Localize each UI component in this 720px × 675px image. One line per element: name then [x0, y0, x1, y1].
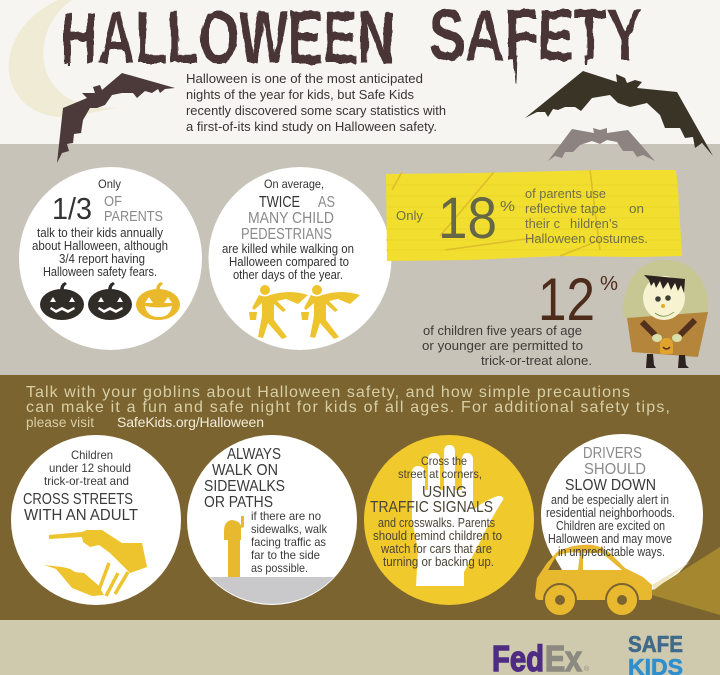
intro text: nights of the year for kids, but Safe Kids — [186, 87, 414, 102]
panel: one third of parents: 3/4 report having — [59, 252, 145, 266]
panel: drivers should slow down — [535, 434, 720, 616]
tips intro text: can make it a fun and safe night for kids of all ages. For additional safety tips, — [26, 399, 670, 416]
panel: drivers should slow down: residential neighborhoods. — [546, 506, 675, 520]
panel: reflective tape statistic: reflective tape — [525, 201, 606, 216]
panel: always walk on sidewalks: facing traffic as — [251, 535, 326, 549]
panel: cross streets with an adult: CROSS STREETS — [23, 491, 133, 508]
panel: drivers should slow down: Halloween and may move — [548, 532, 672, 546]
background: statistics band — [0, 144, 720, 375]
panel: use traffic signals: watch for cars that are — [380, 542, 492, 556]
icon: left bat — [57, 73, 175, 163]
panel: always walk on sidewalks: if there are no — [251, 509, 321, 523]
panel: cross streets with an adult: trick-or-treat and — [44, 474, 129, 488]
panel: twice as many child pedestrians: Halloween compared to — [229, 255, 349, 269]
logo: Safe Kids — [628, 631, 683, 675]
panel: one third of parents: 1/3 — [52, 191, 92, 226]
logo: FedEx: ® — [584, 665, 590, 673]
panel: drivers should slow down: DRIVERS — [583, 445, 642, 462]
icon: handshake — [44, 530, 147, 596]
background: sponsor band — [0, 620, 720, 675]
panel: twelve percent statistic: of children five years of age — [423, 323, 582, 338]
panel: drivers should slow down: SHOULD — [584, 461, 646, 478]
icon: small grey bat — [548, 128, 655, 161]
panel: use traffic signals: street at corners, — [398, 467, 482, 481]
logo: FedEx — [492, 638, 590, 675]
panel: twelve percent statistic — [422, 266, 618, 368]
panel: one third of parents: OF — [104, 194, 122, 210]
panel: use traffic signals: TRAFFIC SIGNALS — [370, 499, 493, 516]
panel: one third of parents: PARENTS — [104, 209, 163, 225]
panel: use traffic signals: USING — [422, 484, 467, 501]
panel: always walk on sidewalks: far to the side — [251, 548, 320, 562]
panel: always walk on sidewalks: ALWAYS — [227, 446, 281, 463]
icon: pedestrian marker — [224, 516, 244, 577]
panel: reflective tape statistic — [386, 170, 682, 261]
logo: Safe Kids: SAFE — [628, 631, 683, 657]
panel: one third of parents: Only — [98, 177, 121, 191]
panel: always walk on sidewalks: SIDEWALKS — [204, 478, 285, 495]
tips intro text: please visit — [26, 415, 94, 430]
tips intro text — [26, 384, 670, 430]
panel: reflective tape statistic: 18 — [438, 186, 497, 251]
icon: trick-or-treater — [301, 285, 360, 339]
icon: headlight beam — [652, 547, 720, 615]
icon: dark pumpkin — [40, 282, 84, 320]
panel: cross streets with an adult — [11, 435, 181, 605]
panel: twice as many child pedestrians: other days of the year. — [233, 268, 343, 282]
icon: car — [535, 545, 652, 616]
panel: twice as many child pedestrians: MANY CHILD — [248, 210, 334, 227]
tips intro text: Talk with your goblins about Halloween safety, and how simple precautions — [26, 384, 630, 401]
panel: reflective tape statistic: Halloween costumes. — [525, 231, 648, 246]
panel: twice as many child pedestrians — [208, 167, 392, 350]
panel: always walk on sidewalks: sidewalks, walk — [251, 522, 328, 536]
intro text: a first-of-its kind study on Halloween safety. — [186, 119, 437, 134]
icon: stop hand — [412, 445, 503, 586]
icon: yellow pumpkin — [136, 282, 180, 320]
panel: always walk on sidewalks: WALK ON — [212, 462, 278, 479]
panel: one third of parents — [19, 167, 202, 350]
background: tips band — [0, 375, 720, 620]
panel: twelve percent statistic: or younger are permitted to — [422, 338, 583, 353]
panel: always walk on sidewalks: as possible. — [251, 561, 308, 575]
sidewalk ground — [210, 577, 334, 604]
panel: always walk on sidewalks — [187, 435, 357, 605]
panel: cross streets with an adult: WITH AN ADULT — [24, 507, 139, 524]
panel: reflective tape statistic: % — [500, 198, 515, 215]
icon: right bat — [525, 71, 713, 156]
panel: always walk on sidewalks: OR PATHS — [204, 494, 273, 511]
panel: cross streets with an adult: Children — [71, 448, 113, 462]
panel: one third of parents: talk to their kids annually — [37, 226, 164, 240]
panel: twice as many child pedestrians: PEDESTRIANS — [241, 226, 332, 243]
panel: reflective tape statistic: hildren’s — [570, 216, 618, 231]
panel: use traffic signals: Cross the — [421, 454, 467, 468]
panel: one third of parents: Halloween safety fears. — [43, 265, 157, 279]
panel: use traffic signals — [364, 435, 534, 605]
panel: twelve percent statistic: % — [600, 273, 618, 295]
panel: twice as many child pedestrians: AS — [318, 194, 335, 211]
tips intro text: SafeKids.org/Halloween — [117, 414, 264, 430]
panel: twice as many child pedestrians: On average, — [264, 177, 324, 191]
panel: twelve percent statistic: trick-or-treat alone. — [481, 353, 592, 368]
panel: drivers should slow down: SLOW DOWN — [565, 477, 656, 494]
intro text: recently discovered some scary statistics with — [186, 103, 446, 118]
icon: trick-or-treater — [249, 285, 308, 339]
panel: reflective tape statistic: their c — [525, 216, 560, 231]
panel: reflective tape statistic: Only — [396, 208, 424, 223]
panel: twice as many child pedestrians: TWICE — [259, 194, 300, 211]
panel: reflective tape statistic: on — [629, 201, 644, 216]
panel: drivers should slow down: Children are excited on — [556, 519, 665, 533]
icon: crescent moon — [9, 0, 120, 117]
panel: use traffic signals: and crosswalks. Parents — [378, 516, 495, 530]
panel: one third of parents: about Halloween, although — [32, 239, 168, 253]
panel: use traffic signals: should remind children to — [373, 529, 502, 543]
panel: drivers should slow down: in unpredictable ways. — [558, 545, 665, 559]
panel: cross streets with an adult: under 12 should — [49, 461, 131, 475]
panel: reflective tape statistic: of parents use — [525, 186, 606, 201]
intro text — [186, 71, 446, 134]
panel: use traffic signals: turning or backing up. — [383, 555, 494, 569]
icon: child in Frankenstein costume — [623, 260, 708, 368]
panel: drivers should slow down: and be especially alert in — [551, 493, 669, 507]
background: header — [0, 0, 720, 145]
icon: dark pumpkin — [88, 282, 132, 320]
panel: twice as many child pedestrians: are killed while walking on — [222, 242, 354, 256]
intro text: Halloween is one of the most anticipated — [186, 71, 423, 86]
panel: twelve percent statistic: 12 — [538, 266, 595, 333]
